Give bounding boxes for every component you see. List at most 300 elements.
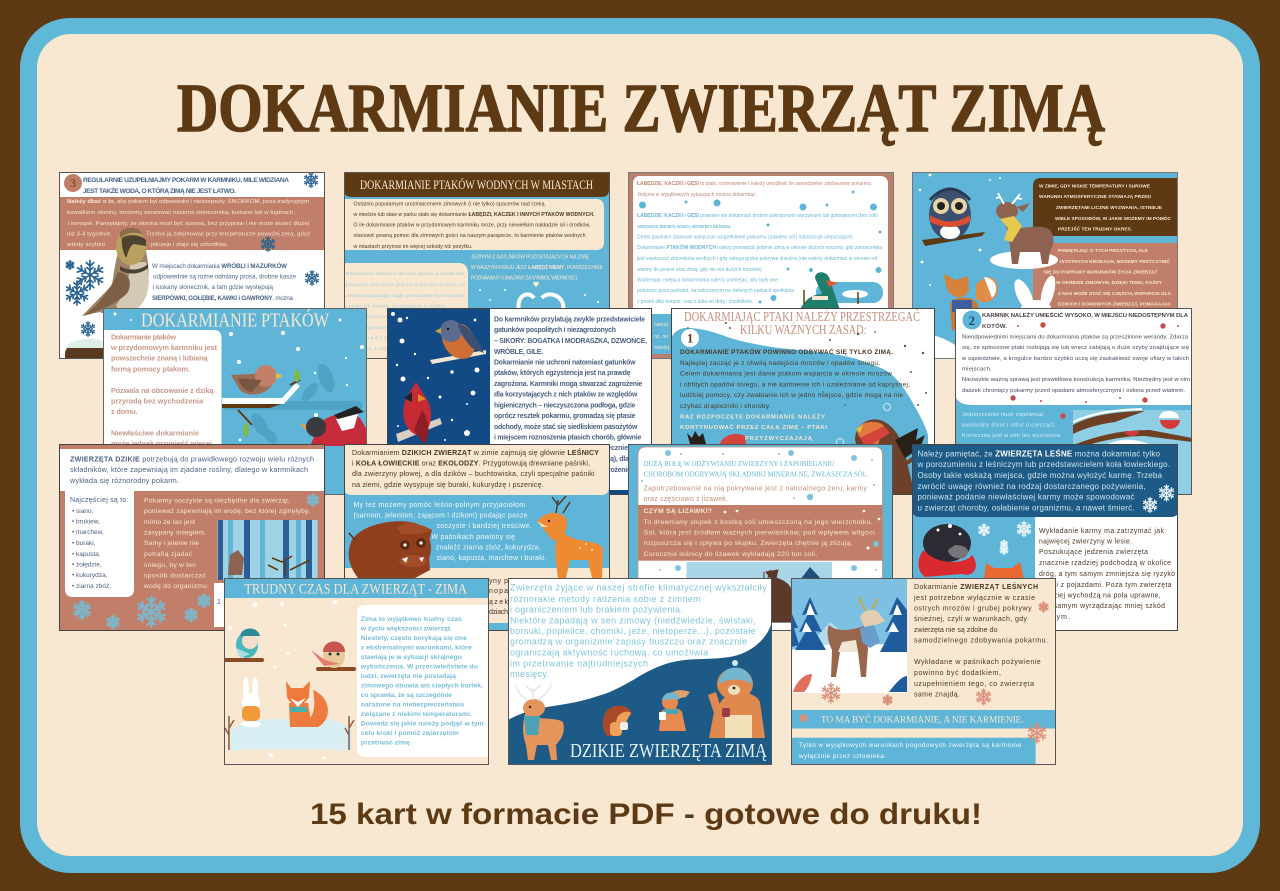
text block: powinno być dodatkiem, [914,670,1001,677]
text block: juicy feed [143,498,310,590]
text block: przetrwać zimę. [361,740,412,746]
text block: Nieodpowiednimi miejscami do dokarmiania ptaków są przeszklone werandy. Zdarza [962,334,1189,340]
text block: w sezonie (zwłaszcza wiosną i jesienią), dla [493,456,629,463]
text block: band text: wtedy szybko [66,242,106,248]
text block: z ekstremalnymi warunkami, które [361,644,472,652]
blue dots [641,450,879,571]
text block: light lines: Jednocześnie musi zapewniać [962,412,1044,418]
text block: Pozwala na obcowanie z dziką [111,386,214,395]
text block: band text: kawałkiem słoniny, możemy serwować nasiona słonecznika, łuskane lub w łupinach, [67,210,295,216]
text block: band text: jełczeje i staje się szkodliwa. [150,242,228,248]
text: waterfowl note on blue: należy [654,322,669,328]
snow dots [479,289,599,303]
ground with snow [65,339,103,359]
heading [83,177,289,195]
text block: blue body: położone poza parkami, na zatoczonym na zielonych parkach spotkania [637,288,794,294]
icon: bunny ears [1010,274,1058,316]
dark snow dots [687,322,927,413]
white text box [357,605,489,757]
icon: number 2 [962,310,982,330]
snow dots [391,312,480,441]
frame [60,172,324,358]
text block: consultation [916,450,1170,512]
text block: consultation: w porozumieniu z leśniczym lub przedstawicielem koła łowieckiego. [916,460,1170,469]
list: foods [70,497,129,590]
card: feeding birds [103,308,367,495]
text block: Zima to wyjątkowo trudny czas [361,616,462,623]
pink band [638,505,882,561]
text block: purpose: Wykładanie karmy ma zatrzymać jak [1039,528,1165,535]
text block: blue body: wiosny do jesieni oraz zimą, gdy nie ma dużych mrozów). [637,267,763,273]
text block: rule one [680,347,910,410]
text block: im przetrwanie najtrudniejszych [510,658,648,668]
picture: deer with mountain [686,562,832,623]
text block [110,332,218,448]
icons: snowflakes [73,494,319,628]
text block: intro: składników, które zapewniają im zjadane rośliny, dlatego w karmnikach [70,465,308,474]
text block: Wykładane w paśnikach pożywienie [914,659,1041,666]
text block: winter: WARUNKI ATMOSFERYCZNE STAWIAJĄ PRZED [1039,194,1152,200]
text block: simple steps: ISTOTNYCH KROKACH, MOŻEMY PRZYCZYNIĆ [1060,257,1171,265]
text block: rule one: Najlepiej zacząć je z chwilą nadejścia mrozów i opadów śniegu. [680,360,880,367]
list: foods: • [72,572,74,579]
red dots [1010,322,1179,419]
list: foods: buraki, [76,540,96,547]
white text box [633,176,888,314]
text block: wykończenia. W przeciwieństwie do [360,664,478,670]
text block: light lines [962,412,1060,439]
icon: hedgehog [603,706,632,736]
card: rules for feeding birds [671,308,935,495]
icon: pink owl on branch [311,642,356,671]
heading: JEST TAKŻE WODA, O KTÓRĄ ZIMĄ NIE JEST ŁATWO. [83,186,236,195]
text block: pale lines: zmniejsza populację, ciągłe gromadzenie się w miastach [346,293,465,299]
text block: ludzi, zwierzęta nie posiadają [361,673,456,680]
text block: band text: Trzeba ją zdejmować przy temperaturze powyżej zera, gdyż [146,232,310,238]
picture: snowy forest with deer [791,578,907,693]
card: hard time for animals [224,578,489,765]
list: foods: • [72,508,74,515]
blue blob [671,328,928,495]
text block: light lines: Konieczna jest w nim też wysuwana [962,433,1060,439]
text block: help: siano, kapusta, marchew i buraki. [436,555,547,562]
white sliver with page fragment [214,583,234,627]
card: wild animals nutrition [59,444,325,631]
text: waterfowl note on blue: między [654,345,670,351]
text block: juicy feed: Samy i jelenie nie [144,540,199,547]
text block: help: znaleźć ziarna zbóż, kukurydza, [436,544,541,552]
note text [798,742,1021,760]
text block: ptaków i ludzi jest to potencjalne zagrożenie [494,467,631,474]
text block: foresters [352,448,599,489]
text block: band text: niż 3-4 tygodnie. [67,232,112,238]
icon: owl on branch [922,189,985,246]
card: minerals and salt licks [628,444,893,631]
text block: winter: PRZEJŚĆ TEN TRUDNY OKRES. [1058,224,1132,232]
text block: simple steps: SIĘ DO POPRAWY WARUNKÓW ŻYCIA ZWIERZĄT [1044,268,1158,276]
text block: purpose: najwięcej zwierzyny w lesie. [1039,538,1132,546]
text block: salt licks: CZYM SĄ LIZAWKI? [644,508,712,515]
text block: white caps [680,414,827,442]
icon: number 3 [64,174,82,192]
heading [644,459,869,478]
cream lower box [344,263,468,359]
list: foods: marchew, [76,529,104,536]
text block: Dowiedz się jakie należy podjąć w tym [361,720,484,728]
text block: Dokarmianie ptaków [111,332,176,342]
white blob [508,578,772,720]
text block: bottom fragments: yny p [489,578,508,585]
text block: odchody, może stać się siedliskiem pasożytów [494,424,638,431]
icon: swans and heart [519,282,563,310]
white text panel [1035,510,1177,631]
text block: rule one: i obfitych opadów śniegu, a nie karmienie ich i uzależnianie od kapryśnej, [680,382,910,388]
text block: dla korzystających z nich ptaków ze względów [494,392,638,398]
icon: boar [349,521,432,578]
footer caption: 15 kart w formacie PDF - gotowe do druku! [310,798,982,831]
list: foods: kukurydza, [76,572,108,579]
card: swans ducks geese [628,172,894,359]
card: birds at feeders [387,308,652,495]
text block: purpose: Poszukujące jedzenia zwierzęta [1039,549,1148,556]
icon: brown bird on snowy branch [222,365,300,437]
text block: ptaków, których egzystencja jest na prawdę [494,370,631,377]
white sliver with page fragment: 1 [217,599,221,606]
text block: help: (sarnom, jeleniom, zającom i dzikom) podając pasze [354,512,528,520]
snow mound [230,719,352,750]
text block: uzupełnieniem tego, co zwierzęta [914,681,1034,688]
heading: KILKU WAŻNYCH ZASAD: [740,322,866,338]
list: foods: • [72,529,74,536]
text block: purpose: kolizji z pojazdami. Poza tym zwierzęta [1039,582,1172,589]
text block: miejscach. [962,366,992,372]
text block: blue body: Dokarmianie PTAKÓW WODNYCH należy prowadzić jedynie zimą w okresie dużych mrozów, gdy zamarzniętą [637,243,882,251]
white dots on band [724,510,880,550]
text block: help [354,502,547,562]
text block: intro: Ostatnio popularnym urozmaiceniem zimowych (i nie tylko) spacerów nad rzeką [354,202,545,208]
heading: DOKARMIANIE PTAKÓW [141,308,329,332]
icon: cardinal on branch [396,382,442,444]
text block: simple steps: W OKRESIE ZIMOWYM. DZIĘKI TEMU, KAŻDY [1056,279,1163,286]
text block: pink: oraz częściowo z lizawek. [644,496,728,503]
text block: blue body: z psami albo kotami; oraz z dala od dróg i chodników. [637,299,753,305]
text block: WRÓBLE, GILE. [494,347,543,356]
text block: purpose: znacznie rzadziej podchodzą w okolice [1039,560,1171,567]
text block: winter [1039,184,1172,232]
text block [360,616,484,746]
icon: deer with yellow scarf [990,193,1058,269]
text block: salt licks: To drewniany słupek z kostką soli umieszczoną na jego wierzchołku. [644,519,873,526]
list: foods: Najczęściej są to: [70,497,129,504]
text block: purpose: tym samym wyrządzając mniej szkód [1039,603,1165,610]
list: foods: ziarna zbóż. [76,583,111,590]
text block: pink intro: ŁABĘDZIE, KACZKI i GĘSI to ptaki, rozleniwienie i należy umożliwić im samodzielne zdobywanie pokarmu. [637,181,872,187]
text block: mute swan: W NASZYM KRAJU JEST ŁABĘDŹ NIEMY, POWSZECHNIE [471,263,604,271]
text block: narażone na niebezpieczeństwa [361,702,464,708]
list: foods: brukiew, [76,518,100,526]
picture: snowy branches with berries [1073,409,1192,495]
text block: bottom fragments [489,578,508,616]
text block: pale lines: Dokarmianie łabędzi w ten sam sposób w czasie lata [346,271,464,277]
text block: help: W paśnikach powinny się [432,534,515,541]
list: foods: żołędzie, [76,562,102,568]
text block: śnieżnej, czyli w warunkach, gdy [914,616,1028,623]
list: foods: • [72,540,74,547]
text block: gatunków pospolitych i niezagrożonych [494,327,616,334]
card: winter conditions [912,172,1178,359]
list: foods: • [72,562,74,568]
text block: związane z niskimi temperaturami. [361,711,472,718]
icon: white bunny [241,677,261,727]
icon: branch fragment [893,457,912,472]
text block: mute swan [471,254,604,282]
ground [912,334,955,359]
icons: white snowflakes [978,485,1174,554]
card: wild animals in winter [508,578,772,765]
text block: ostrych mrozów i grubej pokrywy [914,606,1032,612]
text block: white caps: RAZ ROZPOCZĘTE DOKARMIANIE NALEŻY [680,414,825,420]
card: regularly fill feeder [59,172,325,359]
list: foods: • [72,583,74,590]
list: foods: kapusta, [76,551,101,558]
text block: simple steps [1044,248,1172,308]
text block: formą pomocy ptakom. [111,364,190,374]
text block: winter: W ZIMIE, GDY NISKIE TEMPERATURY I SUROWE [1039,184,1151,190]
icon: number 3: 3 [70,176,76,190]
text block: intro: ZWIERZĘTA DZIKIE potrzebują do prawidłowego rozwoju wielu różnych [70,454,314,464]
text block: pink [644,486,868,503]
text block: consultation: Należy pamiętać, że ZWIERZĘTA LEŚNE można dokarmiać tylko [918,450,1161,458]
card: forest animals feeding rules [791,578,1056,765]
text block: white caps: PRZYZWYCZAJAJĄ [745,436,813,442]
text block: blue body: Wybierając miejsca dokarmiania należy pamiętać, aby były one [637,278,778,284]
text block: Niewłaściwe dokarmianie [111,428,199,438]
icon: rabbit [659,690,690,731]
text block: zagrożona. Karmniki mogą stwarzać zagrożenie [494,381,643,388]
text block: samodzielnego zdobywania pokarmu. [914,638,1048,644]
white header panel [59,449,325,491]
text block: salt licks: Sól, która jest źródłem ważnych pierwiastków, pod wpływem wilgoci [644,530,875,536]
text block: intro: stanowić pewną pomoc dla zimowych gości na naszym parapecie, to karmienie ptaków wodnych [354,233,586,239]
text block: jest potrzebne wyłącznie w czasie [913,595,1035,602]
text block: bottom fragments: ązek [489,599,508,606]
text block: pale lines: zimą także [346,335,387,341]
card: forest animals consultation [912,444,1178,631]
white text box [955,308,1192,405]
text block: juicy feed: sposób dostarczać [144,572,207,580]
blue section [344,488,610,568]
heading: REGULARNIE UZUPEŁNIAJMY POKARM W KARMNIKU, MILE WIDZIANA [83,177,289,184]
text block: purpose: leśnym. [1039,614,1070,621]
blue dots [639,190,882,304]
cream text box [344,199,604,250]
text block: pink intro: Jedynie w wyjątkowych sytuacjach można dokarmiać. [637,192,757,198]
text block: pink: Zapotrzebowanie na nią pokrywane jest z naturalnego żeru, karmy [644,486,868,492]
text block: foresters: na ziemi, gdzie wysypuje się buraki, kukurydzę i pszenicę. [352,481,544,489]
text block: intro [354,202,595,250]
icon: bird [82,228,149,316]
note text: wyłącznie przez człowieka. [798,753,886,760]
white text box [103,330,222,495]
icons: snowflakes [65,172,319,336]
text block: help: My też możemy pomóc leśno-polnym przyjaciołom [354,502,525,509]
text block: foresters: dla zwierzyny płowej, a dla dzików – buchtowiska, czyli specjalne paśniki [352,470,595,478]
icon: fox [286,681,328,727]
picture: forest with deer [218,520,318,580]
icon: fox [944,274,998,330]
list: foods: • [72,551,74,558]
text block: daszek chroniący pokarmy przed opadami atmosferycznymi i osłona przed wiatrem. [962,388,1185,394]
text: waterfowl note on blue [654,322,670,351]
icon: black and red bird [299,406,367,446]
text block: pale lines [346,271,465,352]
text block: intro: w mieście lub staw w parku stało się dokarmianie ŁABĘDZI, KACZEK I INNYCH PTAKÓW WODNYCH. [354,210,595,218]
title: DOKARMIANIE ZWIERZĄT ZIMĄ [177,70,1105,146]
text block: blue body [636,213,882,305]
spiral marks [836,404,890,446]
text block: przyrodą bez wychodzenia [111,397,204,406]
text block: mute swan: JEDNYM Z GATUNKÓW POZOSTAJĄCYCH NA ZIMĘ [471,254,590,260]
text block: consultation: u zwierząt choroby, osłabienie organizmu, a nawet śmierć. [918,504,1134,512]
text block: juicy feed: wodę do organizmu. [143,583,209,590]
text block: miesięcy. [510,669,549,679]
text block: w sąsiedztwie, a krogulce bardzo szybko uczą się zaskakiwać swoje ofiary w takich [961,356,1189,362]
navy text box [912,444,1179,517]
text block: intro: O ile dokarmianie ptaków w przydomowym karmniku może, przy niewielkim nakładzie sił i środków, [354,222,590,228]
text block: i ograniczeniem lub brakiem pożywienia. [510,605,683,615]
white top box [638,447,882,631]
card: feeding waterfowl in cities [344,172,610,359]
text block: borsuki, popielice, chomiki, jeże, nietoperze...), pozostałe [510,626,756,636]
blue note box [791,738,1036,765]
text block: z domu. [111,407,138,416]
text block: stawiają je w sytuacji skrajnego [361,654,462,661]
heading: CHOROBOM ODGRYWAJĄ SKŁADNIKI MINERALNE, ZWŁASZCZA SÓL. [644,468,869,478]
snow dots [114,312,364,442]
text block: powszechnie znaną i lubianą [111,354,208,363]
text block: zwierzęta nie są zdolne do [914,627,998,634]
text block: lower body: odpowiednie są różne odmiany prosa, drobne kasze [153,274,297,280]
text block: rule one: czyhać drapieżniki i choroby. [680,403,771,410]
text block: salt licks [644,508,875,558]
text block: rule one: Celem dokarmiania jest danie ptakom wsparcia w okresie mrozów [680,370,892,378]
icon: deer with scarf [516,684,564,760]
snow dots [228,600,337,760]
band: pink text band [59,197,325,250]
text block: blue body: jest większość zbiorników wodnych i gdy zalega gruba pokrywa śnieżna (nie należy dokarmiać w okresie od [636,256,877,262]
icon: number 2: 2 [968,313,975,328]
text block: juicy feed: śniegu, by w ten [144,562,196,569]
text block: juicy feed: Pokarmy soczyste są niezbędne dla zwierząt, [144,498,290,504]
header bar [344,172,609,197]
text block [913,582,1048,698]
text block: Zwierzęta żyjące w naszej strefie klimatycznej wykształciły [510,583,767,593]
text block: mute swan: POZNAWANY I UWAŻANY ZA SYMBOL WIERNOŚCI. [471,274,578,282]
list: foods: siano, [76,508,94,515]
list: foods: • [72,518,74,526]
heading: KOTÓW. [982,322,1007,330]
text block: i miejscem roznoszenia ptasich chorób, głównie [494,434,641,442]
cream header box [344,444,609,495]
text block: Niestety, często borykają się one [361,635,467,642]
text block: consultation: ponieważ podanie niewłaściwej karmy może spowodować [918,492,1134,502]
text block [510,583,767,679]
text block: – SIKORY: BOGATKA I MODRASZKA, DZWOŃCE, [494,336,647,345]
text block: juicy feed: ponieważ zapewniają im wodę, bez której zginęłyby, [144,508,310,515]
card: foresters and feeders [344,444,610,631]
text block: w przydomowym karmniku jest [110,343,218,352]
text block: w życiu większości zwierząt. [360,626,452,632]
text block: pink intro [637,181,872,198]
text block: lower body: i łuskany słonecznik, a tam gdzie występują [153,284,274,291]
icons: salmon snowflakes [800,602,1049,743]
icon: teal owl on branch [224,628,264,662]
text block: band text [66,199,310,248]
navy picture panel [387,308,490,495]
text block: lower body: W miejscach dokarmiania WRÓBLI i MAZURKÓW [152,262,287,270]
text block: salt licks: rozpuszcza się i spływa po słupku. Zwierzęta chętnie ją zlizują. [644,540,853,547]
heading: KARMNIK NALEŻY UMIEŚCIĆ WYSOKO, W MIEJSCU NIEDOSTĘPNYM DLA [982,311,1189,319]
text block: Dokarmianie ZWIERZĄT LEŚNYCH [914,582,1038,591]
text block: rule one: ludzkiej pomocy, czy zwabianie ich w jedno miejsce, gdzie mogą na nie [680,392,903,399]
text block: band text: Należy dbać o to, aby pokarm był odpowiedni i nieszepsuty. SIKORKOM, poza tradycyjnym [67,199,309,205]
text block: simple steps: DZIKICH I DOMOWYCH ZWIERZĄT, POMAGAJĄC [1058,302,1172,308]
text block: pale lines: powoduje zbyt wiele ptaków w jednym miejscu, co [346,282,465,288]
text block: blue body: warzywami, ziarnami, owsem, siemieniem lub kaszą. [637,224,731,230]
text block: simple steps: PAMIĘTAJĄC O TYCH PROSTYCH, ALE [1058,248,1149,254]
text block: purpose [1039,528,1175,621]
text block: pale lines: na okres zimy [346,346,388,352]
text block: celu kroki i pomóż zwierzętom [361,730,459,737]
text block: consultation: Osoby takie wskażą miejsca, gdzie można wyłożyć karmę. Trzeba [918,471,1163,480]
note text: Tylko w wyjątkowych warunkach pogodowych zwierzęta są karmione [799,742,1021,749]
text block: Niezwykle ważną sprawą jest prawidłowa konstrukcja karmnika. Niezbędny jest w nim [962,377,1190,383]
text block: intro [69,454,314,485]
text block: ograniczają aktywność ruchową, co umożliwia [510,648,708,658]
icon: bluebird on branch [430,320,486,364]
text block: same znajdą. [914,692,960,698]
text block: band text: i konopie. Pamiętajmy, że słonina musi być surowa, bez przypraw i nie może wisieć dłużej [68,221,309,227]
icon: hedgehog with red scarf [918,524,976,577]
text block: intro: w miastach przynosi im więcej szkody niż pożytku. [354,244,472,250]
text: waterfowl note on blue: np. ne [654,334,668,340]
icon: bear [708,660,765,738]
brown text box [1033,178,1177,236]
text block: help: soczyste i bardziej treściwe. [436,523,532,530]
text block: Dokarmianie nie uchroni natomiast gatunków [494,360,636,366]
text block: winter: WIELE SPOSOBÓW, W JAKIE MOŻEMY IM POMÓC [1055,214,1172,222]
icon: robin [855,419,925,495]
heading [982,311,1189,330]
text block: różnorakie metody radzenia sobie z zimnem [510,594,701,604]
leaves and teal branch [222,362,362,446]
text block: blue body: ŁABĘDZIE, KACZKI i GĘSI powinien się dokarmiać drobno pokrojonymi warzywami lub gotowanymi (bez soli) [637,213,878,219]
text block: blue body: Chleb powinien stanowić wyłącznie uzupełnienie pokarmu (zawiera sól i substancje ulepszające). [637,234,854,240]
header band [224,578,489,598]
text block: co sprawia, że są szczególnie [361,692,452,699]
text block: oprócz resztek pokarmu, gromadzą się ptasie [494,413,636,420]
text block: pale lines: przebywają także [346,325,387,331]
text block: foresters: Dokarmianiem DZIKICH ZWIERZĄT w zimie zajmują się głównie LEŚNICY [352,448,599,457]
text block: higienicznych – nieczyszczona podłoga, gdzie [494,402,636,410]
text block: lower body: SIERPÓWKI, GOŁĘBIE, KAWKI i GAWRONY, można [152,294,294,302]
text block: purpose: rzadziej wychodzą na pola uprawne, [1039,592,1161,600]
text block: juicy feed: potrafią zjadać [144,551,193,558]
white list panel [65,491,134,597]
blue strip [344,623,610,631]
text block: może jednak przynieść więcej [111,439,212,448]
text block: Niektóre zapadają w sen zimowy (niedźwiedzie, świstaki, [510,616,756,626]
